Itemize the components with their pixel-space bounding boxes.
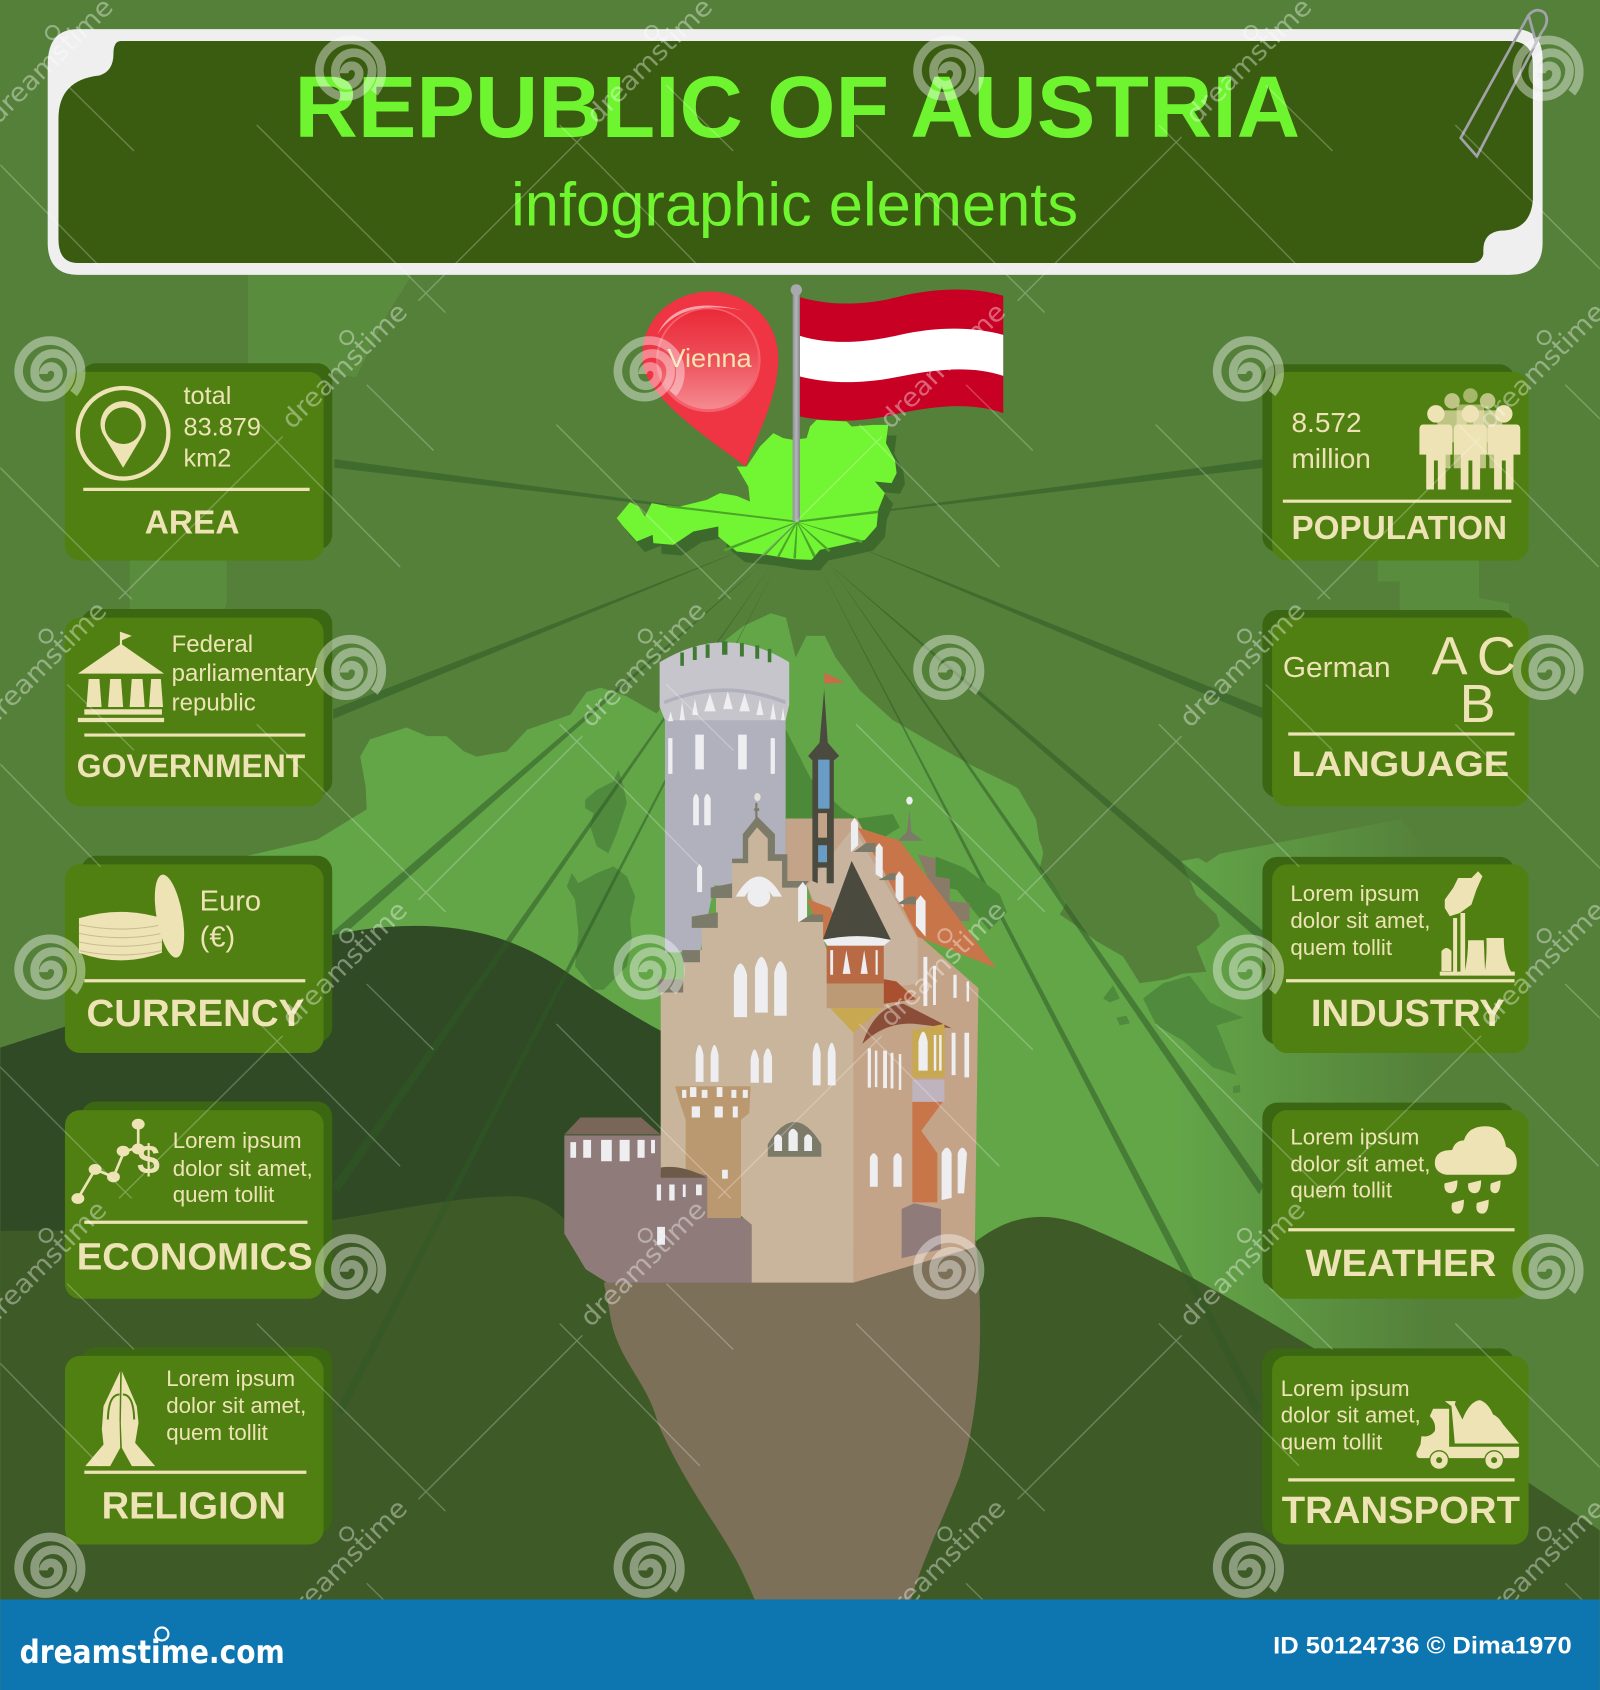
panel: weather [1262,1103,1529,1299]
icon: paperclip [1461,10,1547,156]
icon: growth chart: $ [137,1137,160,1183]
icon: location pin [78,388,168,479]
transport text: dolor sit amet, [1281,1403,1421,1428]
watermark text: dreamstime [874,895,1012,1033]
title banner [48,10,1547,275]
transport text: Lorem ipsum [1281,1376,1410,1401]
flag pole [791,284,802,521]
religion label: RELIGION [102,1485,286,1527]
icon: letters: A [1432,627,1468,687]
subtitle: infographic elements [511,170,1078,239]
industry text: quem tollit [1290,935,1393,960]
Vienna pin [643,292,778,467]
watermark text: dreamstime [1180,0,1318,130]
icon: parliament building [78,632,164,722]
watermark text: dreamstime [276,1494,414,1631]
panel: government [65,609,332,806]
panel: area [65,363,332,560]
icon: coins [79,872,190,960]
area value: 83.879 [183,413,261,441]
economics text: quem tollit [173,1182,275,1207]
watermark text: dreamstime [575,596,712,734]
Austria map [617,420,905,570]
watermark text: dreamstime [1174,1195,1312,1333]
industry text: Lorem ipsum [1290,881,1419,906]
weather label: WEATHER [1305,1242,1496,1284]
watermark text: dreamstime [874,297,1012,435]
economics text: dolor sit amet, [173,1156,313,1181]
currency label: CURRENCY [86,992,304,1034]
panel: currency [65,856,332,1053]
government label: GOVERNMENT [77,748,306,784]
icon: rain cloud [1435,1126,1517,1214]
footer bar [0,1599,1600,1690]
panel: population [1262,364,1529,560]
panel: transport [1262,1348,1529,1544]
panel: industry [1262,857,1529,1053]
rock [604,1239,980,1599]
icon: praying hands [85,1371,155,1466]
transport text: quem tollit [1281,1430,1383,1455]
hills [0,926,1600,1599]
area label: AREA [145,505,240,542]
watermark text: dreamstime [276,895,414,1033]
religion text: Lorem ipsum [166,1366,295,1391]
icon: factory [1440,871,1515,976]
weather text: dolor sit amet, [1290,1152,1430,1177]
government value: republic [172,689,256,716]
area value: total [183,382,231,410]
watermark text: dreamstime [276,297,414,435]
watermark text: dreamstime [575,1195,712,1333]
icon: dump truck [1416,1400,1519,1469]
transport label: TRANSPORT [1282,1489,1520,1531]
industry text: dolor sit amet, [1290,908,1430,933]
government value: parliamentary [172,660,317,687]
religion text: quem tollit [166,1420,269,1445]
islands [567,770,635,990]
panel: language [1262,610,1529,806]
industry label: INDUSTRY [1311,992,1505,1034]
sea and Balkans silhouette [950,581,1400,1093]
Austrian flag [800,290,1003,421]
government value: Federal [172,631,253,658]
footer id: ID 50124736 © Dima1970 [1273,1633,1572,1659]
icon: letters: C [1477,627,1516,687]
rays from map [332,459,1263,1414]
currency value: Euro [200,886,261,918]
icon: letters: B [1460,674,1496,734]
area value: km2 [183,445,231,473]
religion text: dolor sit amet, [166,1393,306,1418]
economics text: Lorem ipsum [173,1128,302,1153]
population value: 8.572 [1291,407,1362,438]
watermark text: dreamstime [581,0,719,130]
population label: POPULATION [1291,510,1507,547]
watermark text: dreamstime [1174,596,1312,734]
economics label: ECONOMICS [77,1236,313,1278]
population value: million [1291,443,1371,474]
map, flag and pin group [617,284,1003,570]
castle [564,641,1007,1283]
language label: LANGUAGE [1291,744,1509,784]
footer logo: dreamstime.com [20,1633,285,1671]
language value: German [1283,652,1391,684]
footer logo spiral [155,1627,168,1640]
currency value: (€) [200,921,235,953]
icon: people [1419,388,1520,490]
weather text: Lorem ipsum [1290,1125,1419,1150]
title: REPUBLIC OF AUSTRIA [295,58,1300,156]
panel: economics [65,1102,332,1299]
weather text: quem tollit [1290,1177,1393,1202]
watermark text: dreamstime [874,1494,1012,1631]
panel: religion [65,1347,332,1544]
Vienna pin: Vienna [667,343,752,373]
icon: growth chart [71,1119,160,1204]
